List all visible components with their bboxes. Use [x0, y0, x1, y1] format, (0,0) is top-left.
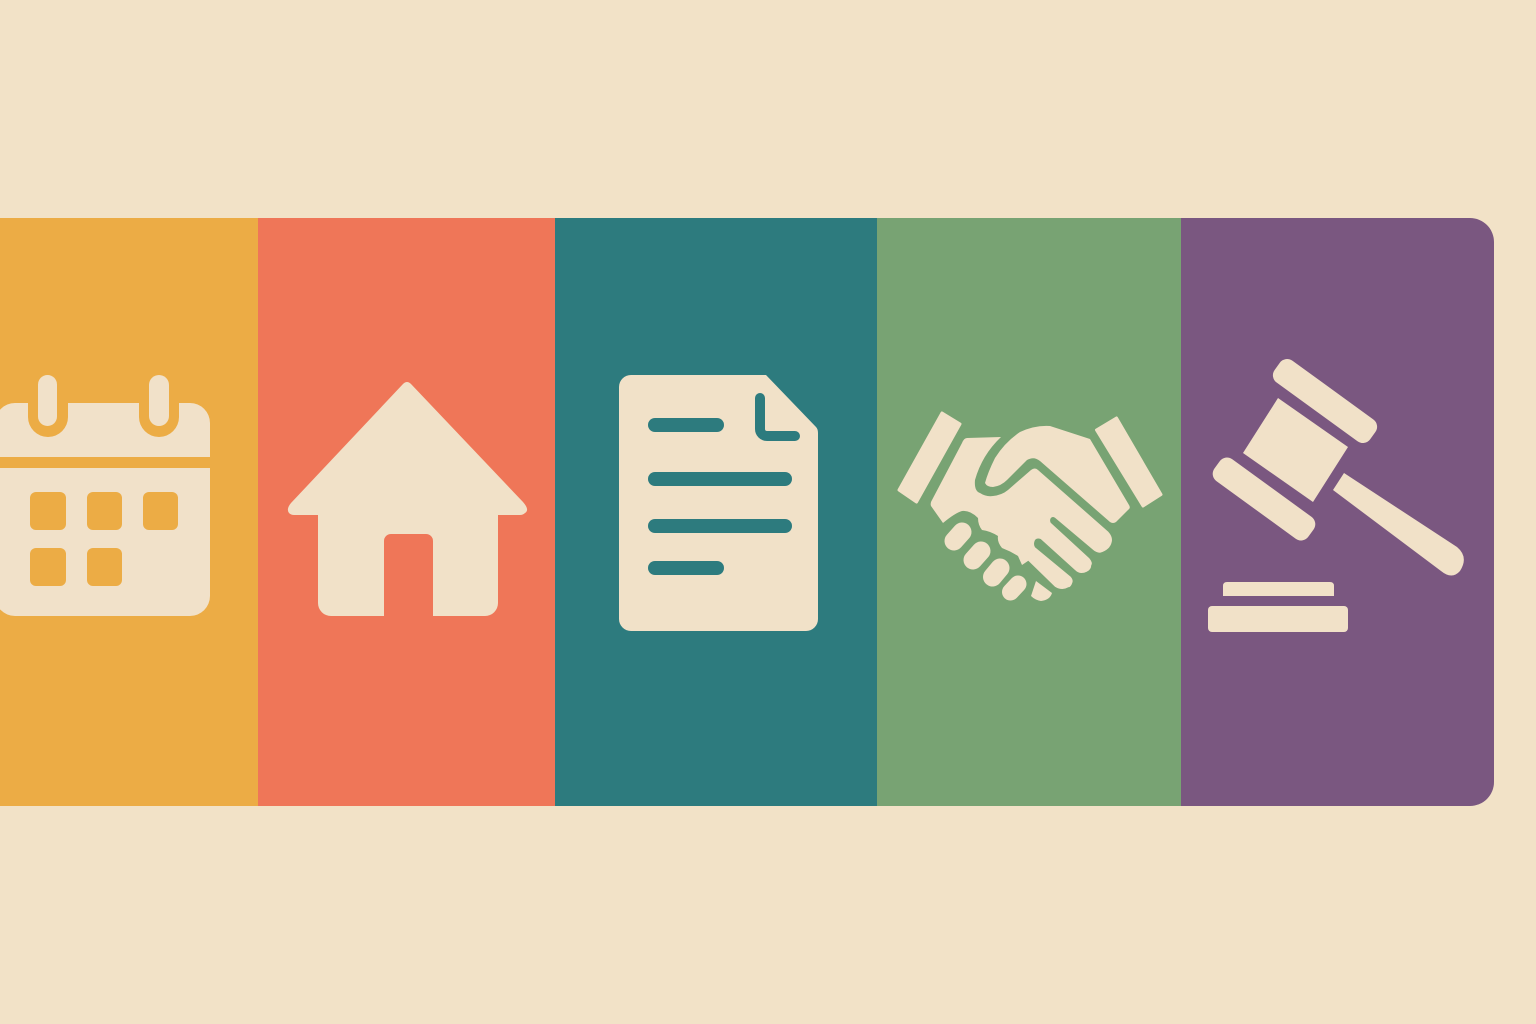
panel: house — [258, 218, 555, 806]
panel: calendar — [0, 218, 258, 806]
icon: calendar — [0, 375, 210, 616]
icon: house — [288, 382, 527, 616]
icon: gavel — [1208, 355, 1464, 632]
icon: document — [619, 375, 818, 631]
icon: handshake — [899, 413, 1161, 601]
panel: document — [555, 218, 877, 806]
panel: gavel — [1181, 218, 1494, 806]
panel: handshake — [877, 218, 1181, 806]
